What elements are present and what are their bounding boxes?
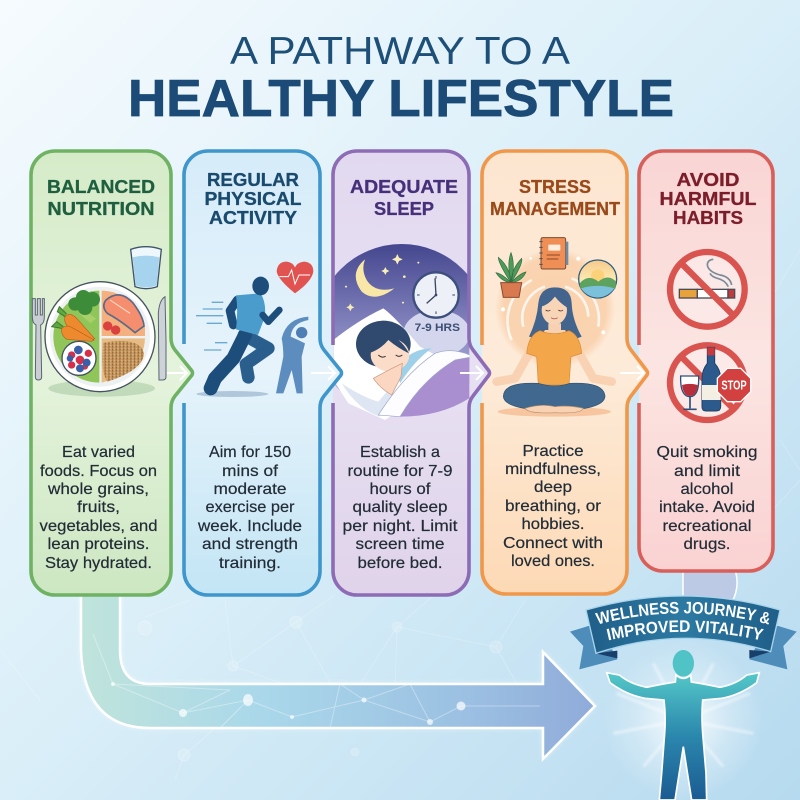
woman <box>497 287 612 413</box>
panel: balanced nutrition <box>31 151 192 595</box>
body text: mindfulness, <box>505 461 601 478</box>
body text: deep <box>534 479 572 496</box>
panel: adequate sleep <box>315 151 490 595</box>
heading: AVOID <box>676 170 740 190</box>
heading: ADEQUATE <box>350 177 458 197</box>
heading <box>204 170 302 228</box>
background network pattern <box>0 250 800 780</box>
heading: ACTIVITY <box>209 208 297 228</box>
arrow to next step <box>460 366 483 380</box>
banner: wellness journey and improved vitality: WELLNESS JOURNEY & <box>595 602 770 624</box>
body text: and strength <box>202 536 298 553</box>
icon: sleeping person under night sky with clock <box>333 244 470 420</box>
body text: training. <box>219 555 281 572</box>
body text: foods. Focus on <box>40 463 157 480</box>
grains <box>102 341 144 382</box>
icon: runner, stretching figure and heart <box>196 262 313 397</box>
body text: routine for 7-9 <box>348 463 453 480</box>
broccoli <box>68 290 100 323</box>
knife <box>158 297 166 380</box>
body text: moderate <box>214 481 287 498</box>
banner: wellness journey and improved vitality: IMPROVED VITALITY <box>606 620 764 640</box>
carrots <box>52 307 95 341</box>
body text: exercise per <box>206 499 295 516</box>
heading: SLEEP <box>374 199 434 219</box>
glass <box>131 247 161 289</box>
connector band to wellness figure <box>683 570 737 600</box>
body text: breathing, or <box>505 498 602 515</box>
title: HEALTHY LIFESTYLE <box>128 70 674 128</box>
icon: plate with vegetables, fish, grains, glass and cutlery <box>32 247 166 397</box>
body text: before bed. <box>358 555 442 572</box>
body text: Connect with <box>503 535 603 552</box>
heading: PHYSICAL <box>204 189 302 209</box>
body text: fruits, <box>77 499 120 516</box>
heading: REGULAR <box>207 170 299 190</box>
body text: Practice <box>522 443 584 460</box>
body text <box>40 444 158 572</box>
heading: HABITS <box>673 208 743 228</box>
heading <box>660 170 757 228</box>
body text <box>342 444 458 572</box>
body text: whole grains, <box>47 481 149 498</box>
journal <box>539 238 568 269</box>
salmon <box>104 295 144 333</box>
banner: wellness journey and improved vitality <box>570 595 796 670</box>
body text: screen time <box>356 536 445 553</box>
heading: MANAGEMENT <box>490 199 620 219</box>
body text: Establish a <box>360 444 440 461</box>
body text: quality sleep <box>352 499 448 516</box>
body text: week. Include <box>197 518 302 535</box>
pathway arrow <box>81 590 595 759</box>
body text <box>656 444 758 553</box>
panel: avoid harmful habits <box>639 151 773 571</box>
body text: Quit smoking <box>656 444 758 461</box>
body text: mins of <box>222 463 279 480</box>
body text: drugs. <box>684 536 730 553</box>
icon: sleeping person under night sky with clock: 7-9 HRS <box>415 322 460 334</box>
title: A PATHWAY TO A <box>230 30 570 73</box>
heading: NUTRITION <box>48 199 154 219</box>
plant <box>496 253 526 297</box>
body text: intake. Avoid <box>659 499 755 516</box>
wellness figure <box>603 640 763 800</box>
body text: recreational <box>662 518 752 535</box>
icon: no alcohol: STOP <box>721 379 747 393</box>
heading: STRESS <box>519 177 591 197</box>
body text <box>503 443 603 570</box>
body text: and limit <box>674 463 741 480</box>
body text: loved ones. <box>511 553 595 570</box>
body text: hours of <box>370 481 431 498</box>
icon: no alcohol <box>670 345 751 420</box>
panel: regular physical activity <box>184 151 342 595</box>
heading <box>350 177 458 219</box>
panel: stress management <box>482 151 648 594</box>
body text: hobbies. <box>522 516 584 533</box>
heading <box>47 177 155 219</box>
icon: no smoking <box>670 252 745 327</box>
body text <box>197 444 302 572</box>
body text: per night. Limit <box>342 518 458 535</box>
body text: Eat varied <box>62 444 135 461</box>
arrow to next step <box>167 366 187 380</box>
title <box>128 30 674 128</box>
body text: Aim for 150 <box>209 444 291 461</box>
fork <box>32 299 44 380</box>
body text: alcohol <box>680 481 734 498</box>
heading: HARMFUL <box>660 189 757 209</box>
body text: Stay hydrated. <box>45 555 152 572</box>
berries <box>62 341 96 375</box>
heading: BALANCED <box>47 177 155 197</box>
arrow to next step <box>311 366 335 380</box>
body text: vegetables, and <box>40 518 158 535</box>
arrow to next step <box>620 366 644 380</box>
body text: lean proteins. <box>48 536 150 553</box>
landscape <box>579 260 617 298</box>
heading <box>490 177 620 219</box>
icon: meditating woman with plant, journal and landscape <box>495 238 617 417</box>
